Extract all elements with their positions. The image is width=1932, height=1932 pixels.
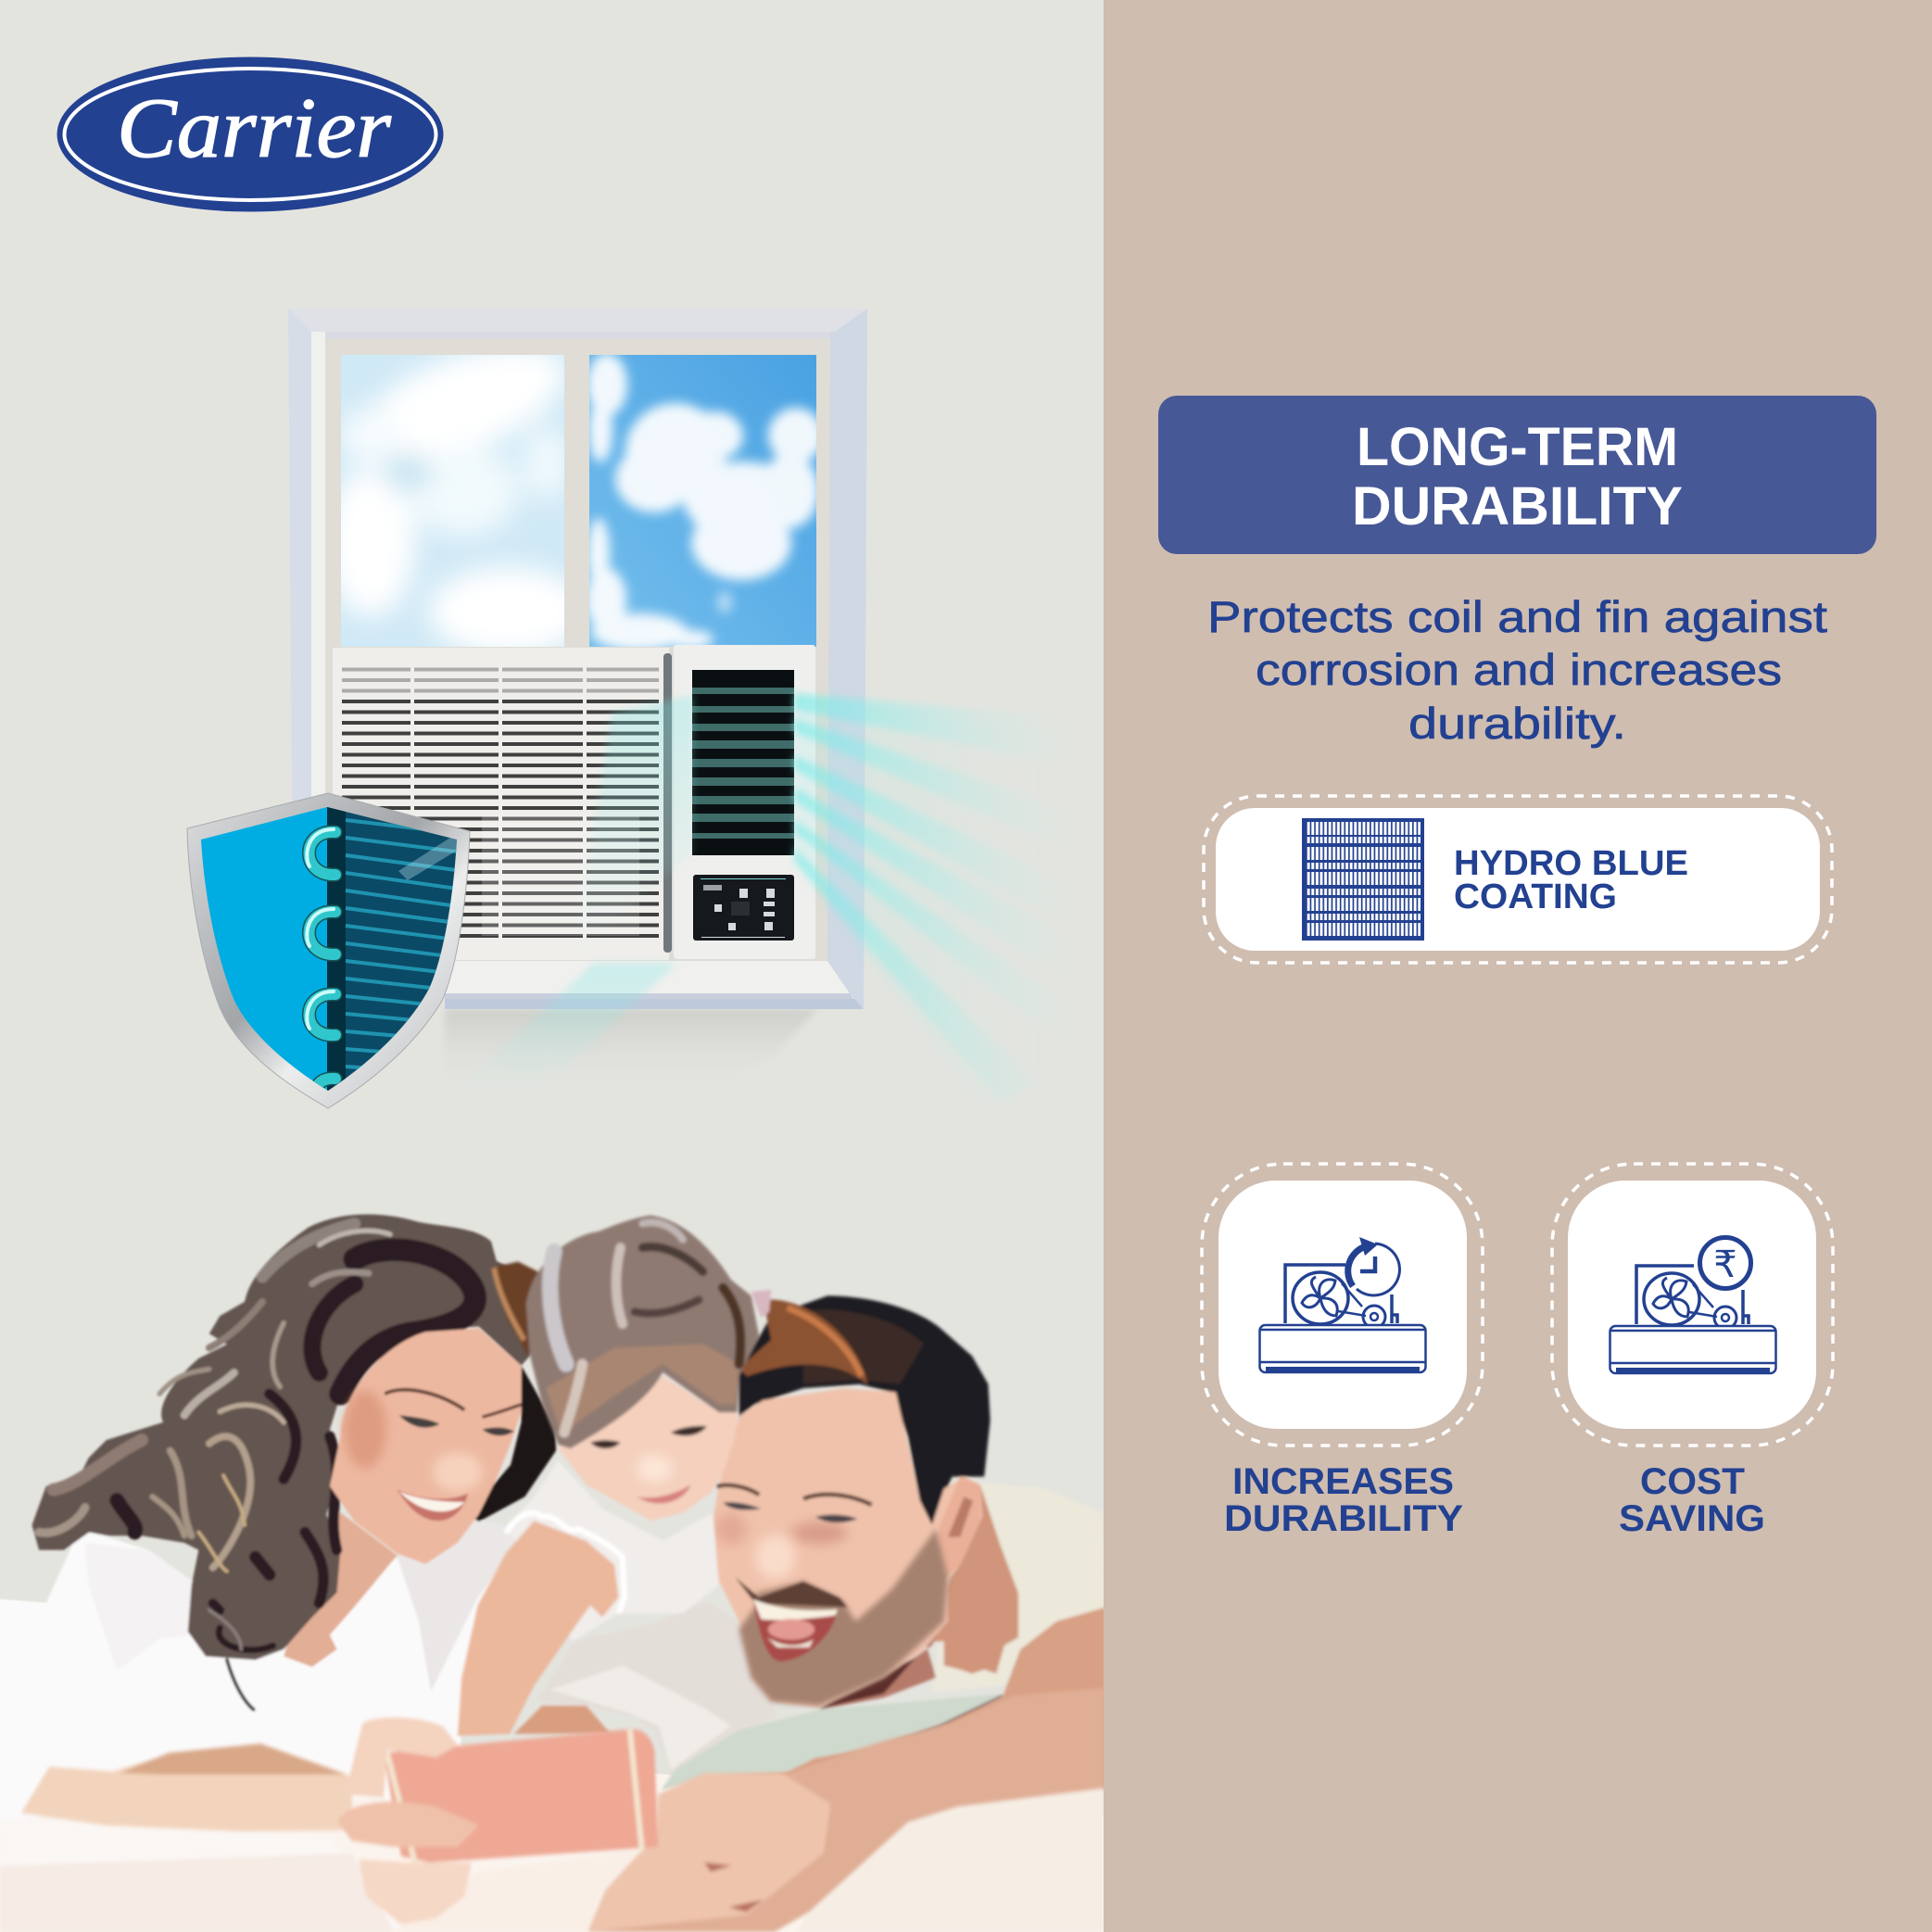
window sill <box>445 309 867 1009</box>
faint air over the unit and below <box>445 695 693 1103</box>
girl's hair <box>526 1216 759 1448</box>
woman's shirt <box>0 1520 518 1826</box>
illustration: window with air conditioner <box>288 309 1084 1112</box>
icon: protective coil shield <box>187 793 470 1108</box>
girl's arm <box>458 1521 618 1736</box>
description text: durability. <box>1408 699 1626 748</box>
man's hair <box>739 1295 991 1525</box>
description text: Protects coil and fin against <box>1207 592 1827 641</box>
man and girl <box>458 1216 1105 1838</box>
cool air rays <box>794 693 1084 1112</box>
photo: family looking at a phone <box>0 1215 1105 1932</box>
wall shadow below the sill <box>445 1009 817 1093</box>
label: increases durability: DURABILITY <box>1224 1498 1463 1539</box>
description text: corrosion and increases <box>1256 645 1782 694</box>
man's arm <box>749 1607 1104 1792</box>
man's shirt <box>537 1483 1105 1774</box>
AC divider strip <box>663 653 672 953</box>
front bedding right <box>795 1788 1104 1932</box>
pillow <box>661 1694 1003 1790</box>
man's face <box>711 1388 982 1708</box>
heading text <box>1352 417 1683 537</box>
girl's dress <box>504 1460 719 1641</box>
bedding under the family <box>0 1599 1104 1932</box>
girl's ponytail <box>739 1299 867 1384</box>
woman's hand holding the phone <box>338 1718 479 1925</box>
control panel <box>693 875 794 941</box>
centre bedding <box>398 1927 408 1931</box>
label: hydro blue coating: HYDRO BLUE <box>1454 844 1688 883</box>
phone, hands and bedding foreground <box>0 1688 1104 1932</box>
dark hair behind the face <box>468 1366 556 1522</box>
AC grille <box>333 648 669 960</box>
label: hydro blue coating: COATING <box>1454 878 1617 916</box>
girl's hand around man's neck <box>928 1484 1018 1673</box>
logo: Carrier oval: Carrier <box>117 81 392 175</box>
icon: coil grid <box>1302 818 1424 941</box>
girl's side bun <box>492 1262 538 1356</box>
man's beard <box>739 1529 948 1706</box>
man's forearm and hand <box>587 1688 1104 1932</box>
woman's forearm <box>21 1744 352 1832</box>
rupee symbol: ₹ <box>1713 1244 1737 1286</box>
icon: AC with rupee <box>1610 1238 1775 1374</box>
woman's face <box>330 1329 522 1564</box>
window frame <box>288 309 867 1009</box>
woman <box>0 1215 556 1826</box>
label: increases durability: INCREASES <box>1232 1461 1454 1502</box>
man's neck <box>820 1636 938 1711</box>
icon: AC with clock <box>1260 1237 1425 1373</box>
benefit: increases durability <box>1202 1164 1483 1539</box>
heading text: DURABILITY <box>1352 476 1683 537</box>
panel: left background <box>0 0 1105 1932</box>
label: cost saving <box>1619 1461 1765 1539</box>
heading banner <box>1158 396 1876 554</box>
woman's hair <box>32 1215 546 1710</box>
phone <box>384 1729 658 1864</box>
woman's neck and chest <box>284 1508 398 1667</box>
sky panes <box>341 355 816 647</box>
description text <box>1207 592 1827 748</box>
benefit: cost saving <box>1552 1164 1833 1539</box>
label: cost saving: COST <box>1640 1461 1745 1502</box>
AC right face <box>674 645 815 959</box>
label: hydro blue coating <box>1454 844 1688 916</box>
man's open mouth <box>753 1599 838 1661</box>
label: increases durability <box>1224 1461 1463 1539</box>
girl's hair tie <box>751 1290 771 1318</box>
heading text: LONG-TERM <box>1357 417 1678 477</box>
man's inner arm <box>514 1706 611 1734</box>
feature pill: hydro blue coating <box>1204 796 1832 963</box>
panel: right background <box>1104 0 1932 1932</box>
label: cost saving: SAVING <box>1619 1498 1765 1539</box>
front bedding left <box>2 1856 389 1929</box>
air vent with louvres <box>692 670 794 855</box>
girl's face <box>558 1376 737 1521</box>
logo: Carrier oval <box>57 57 443 211</box>
